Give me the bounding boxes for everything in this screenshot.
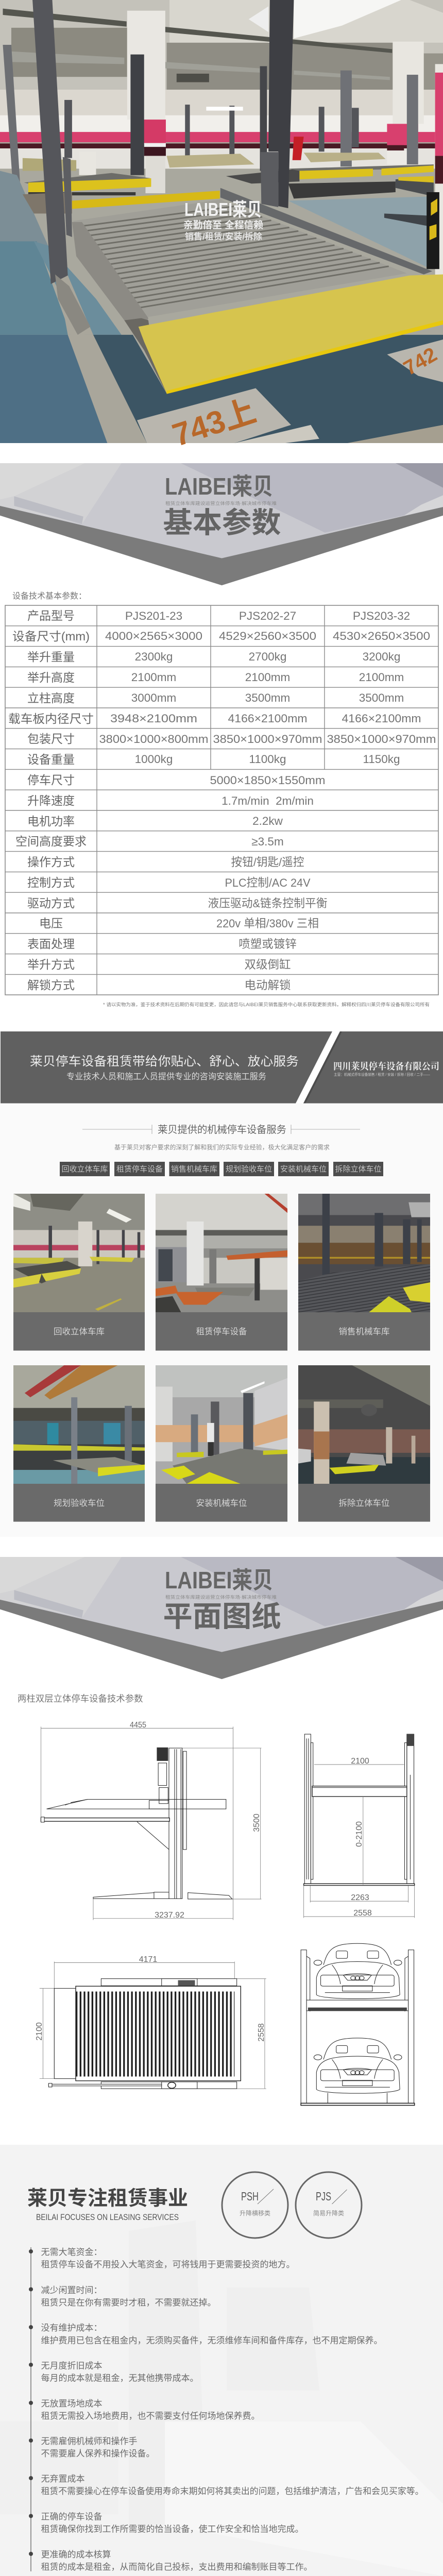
front elevation drawing <box>304 1734 415 1918</box>
card: recycling <box>13 1194 145 1351</box>
card: recycling: 回收立体车库 <box>54 1327 105 1336</box>
dark service banner <box>1 1031 443 1104</box>
dimension 2100: 2100 <box>351 1757 369 1766</box>
banner headline: 莱贝停车设备租赁带给你贴心、舒心、放心服务 <box>30 1055 299 1069</box>
card: removal <box>298 1365 430 1522</box>
plan view drawing <box>35 1955 266 2089</box>
badge: PSH <box>222 2172 288 2238</box>
panel: focus on leasing <box>0 2145 443 2576</box>
brand logo: LAIBEI莱贝 <box>165 1567 273 1594</box>
dimension 4455: 4455 <box>130 1721 146 1730</box>
parameter table: 举升方式 <box>27 958 75 971</box>
parameter table: 设备尺寸(mm) <box>12 630 90 643</box>
parameter table: 电机功率 <box>27 815 75 828</box>
service tags: 销售机械车库 <box>171 1165 217 1174</box>
table caption: 设备技术基本参数： <box>12 591 87 601</box>
benefits timeline: 无弃置成本 <box>41 2474 84 2484</box>
benefits timeline: 维护费用已包含在租金内，无须购买备件，无须维修车间和备件库存，也不用定期保养。 <box>41 2336 382 2345</box>
benefits timeline: 租赁无需投入场地费用，也不需要支付任何场地保养费。 <box>41 2411 260 2421</box>
badge: PSH: 升降横移类 <box>240 2210 270 2217</box>
benefits timeline: 租赁只是在你有需要时才租，不需要就还掉。 <box>41 2298 216 2308</box>
benefits timeline: 租赁确保你找到工作所需要的恰当设备，使工作安全和恰当地完成。 <box>41 2523 304 2534</box>
drawing caption: 两柱双层立体停车设备技术参数 <box>18 1693 143 1704</box>
parameter table: 载车板内径尺寸 <box>8 712 94 725</box>
service tags: 安装机械车位 <box>280 1165 327 1174</box>
service tags: 规划验收车位 <box>226 1165 272 1174</box>
section banner: plan drawings <box>0 1557 443 1679</box>
parameter table: 空间高度要求 <box>15 835 87 848</box>
parameter table: 停车尺寸 <box>27 773 75 787</box>
benefits timeline: 减少闲置时间： <box>41 2285 102 2295</box>
parameter table: 喷塑或镀锌 <box>238 938 297 951</box>
service tags <box>60 1162 383 1176</box>
floor marking 743: 743上 <box>168 393 260 453</box>
card: removal: 拆除立体车位 <box>339 1498 389 1508</box>
parameter table: 4530×2650×3500 <box>333 630 430 642</box>
parameter table: 按钮/钥匙/遥控 <box>231 856 304 869</box>
card: leasing <box>156 1194 287 1351</box>
brand tagline: 租赁立体车库建设运营立体停车场·解决城市停车难 <box>165 1595 277 1600</box>
benefits timeline: 无放置场地成本 <box>41 2399 102 2409</box>
company business line: 主营：机械式停车设备销售 / 租赁 / 安装 / 拆除 / 回收 / 二手—— <box>334 1072 430 1077</box>
parameter table: 3850×1000×970mm <box>327 733 436 745</box>
card: installation <box>156 1365 287 1522</box>
brand tagline: 租赁立体车库建设运营立体停车场·解决城市停车难 <box>165 501 277 506</box>
panel: machinery parking services <box>0 1104 443 1537</box>
dimension 4171: 4171 <box>139 1955 157 1964</box>
parameter table: 举升重量 <box>27 650 75 664</box>
card: leasing: 租赁停车设备 <box>196 1327 247 1336</box>
parameter table: 2.2kw <box>252 815 283 827</box>
parameter table: 3200kg <box>363 650 400 663</box>
parameter table: 表面处理 <box>27 937 75 951</box>
parameter table: 1.7m/min 2m/min <box>222 794 314 807</box>
table footnote: * 请以实物为准，鉴于技术资料在后期仍有可能变更，因此请您与LAIBEI莱贝销售服务中心联系获取更新资料。解释权归四川莱贝停车设备有限公司所有 <box>103 1002 430 1007</box>
parameter table: 1100kg <box>249 753 286 766</box>
benefits timeline: 无需雇佣机械师和操作手 <box>41 2436 137 2446</box>
parameter table: 2100mm <box>245 671 290 684</box>
side elevation drawing <box>41 1721 261 1920</box>
badge: PJS: PJS <box>316 2190 331 2203</box>
parameter table: PJS201-23 <box>125 609 182 622</box>
parameter table: 双级倒缸 <box>244 958 291 971</box>
parameter table: 2100mm <box>131 671 176 684</box>
parameter table: 1150kg <box>363 753 400 766</box>
watermark slogan: 亲勤倍至 全程信赖 <box>183 219 263 231</box>
benefits timeline: 无需大笔资金： <box>41 2247 102 2257</box>
dimension 2100 plan: 2100 <box>35 2022 44 2041</box>
parameter table: 4000×2565×3000 <box>105 630 202 642</box>
parameter table: 4529×2560×3500 <box>219 630 316 642</box>
parameter table: 2700kg <box>249 650 286 663</box>
parameter table: 3948×2100mm <box>110 712 197 725</box>
badge: PSH: PSH <box>241 2190 259 2203</box>
parameter table: 设备重量 <box>27 753 75 766</box>
parameter table: 解锁方式 <box>27 978 75 992</box>
parameter table: 220v 单相/380v 三相 <box>216 917 319 930</box>
parameter table: 3500mm <box>359 691 404 704</box>
dimension 2558 plan: 2558 <box>257 2023 266 2042</box>
banner heading: 基本参数 <box>163 506 281 539</box>
floor marking 742: 742 <box>400 343 441 380</box>
parameter table: 立柱高度 <box>27 691 75 705</box>
parameter table: 3500mm <box>245 691 290 704</box>
card: sales <box>298 1194 430 1351</box>
parameter table: 控制方式 <box>27 876 75 889</box>
service tags: 租赁停车设备 <box>116 1165 163 1174</box>
benefits timeline: 无月度折旧成本 <box>41 2361 102 2371</box>
parameter table: ≥3.5m <box>251 835 284 848</box>
dimension 0-2100: 0-2100 <box>355 1821 364 1847</box>
company calligraphy name: 四川莱贝停车设备有限公司 <box>333 1059 439 1073</box>
section banner: basic parameters <box>0 463 443 585</box>
section intro: 基于莱贝对客户要求的深刻了解和我们的实际专业经验，极大化满足客户的需求 <box>114 1143 330 1151</box>
banner heading: 平面图纸 <box>163 1600 281 1633</box>
benefits timeline: 租赁停车设备不用投入大笔资金，可将钱用于更需要投资的地方。 <box>41 2260 295 2269</box>
leasing subheading: BEILAI FOCUSES ON LEASING SERVICES <box>36 2212 179 2222</box>
parameter table: PJS202-27 <box>239 609 296 622</box>
technical drawings <box>35 1721 415 2105</box>
watermark logo: LAIBEI莱贝 <box>184 199 262 220</box>
watermark services: 销售/租赁/安装/拆除 <box>185 231 262 242</box>
parameter table: PJS203-32 <box>353 609 410 622</box>
parameter table: 2100mm <box>359 671 404 684</box>
dimension 3237.92: 3237.92 <box>155 1911 184 1920</box>
parameter table <box>5 605 438 995</box>
parameter table: 3800×1000×800mm <box>99 733 208 745</box>
hero photo: two-post parking lift <box>0 0 443 453</box>
parameter table: 升降速度 <box>27 794 75 807</box>
front view with cars <box>301 1943 415 2105</box>
parameter table: 操作方式 <box>27 855 75 869</box>
badge: PJS <box>296 2172 362 2238</box>
parameter table: 液压驱动&链条控制平衡 <box>208 897 328 910</box>
parameter table: 5000×1850×1550mm <box>210 774 326 787</box>
parameter table: 电动解锁 <box>244 979 291 992</box>
parameter table: 1000kg <box>135 753 173 766</box>
benefits timeline: 不需要雇人保养和操作设备。 <box>41 2449 155 2459</box>
service tags: 拆除立体车位 <box>335 1165 382 1174</box>
leasing heading: 莱贝专注租赁事业 <box>27 2188 188 2210</box>
benefits timeline: 没有维护成本： <box>41 2323 102 2333</box>
parameter table: 包装尺寸 <box>27 732 75 745</box>
benefits timeline: 正确的停车设备 <box>41 2512 102 2521</box>
parameter table: 4166×2100mm <box>342 712 421 725</box>
benefits timeline: 租赁不需要操心在停车设备使用寿命末期如何将其卖出的问题，包括维护清洁，广告和会见买家等。 <box>41 2486 423 2496</box>
card: planning: 规划验收车位 <box>54 1498 105 1508</box>
parameter table: 3850×1000×970mm <box>213 733 322 745</box>
card: installation: 安装机械车位 <box>196 1498 247 1508</box>
service tags: 回收立体车库 <box>61 1165 108 1174</box>
parameter table: 4166×2100mm <box>228 712 307 725</box>
card: sales: 销售机械车库 <box>339 1327 389 1336</box>
parameter table: 2300kg <box>135 650 173 663</box>
parameter table: 产品型号 <box>27 609 75 622</box>
section heading <box>82 1124 360 1136</box>
parameter table: 举升高度 <box>27 671 75 684</box>
badge: PJS: 简易升降类 <box>313 2210 344 2217</box>
benefits timeline: 更准确的成本核算 <box>41 2550 111 2560</box>
benefits timeline: 租赁的成本是租金，从而简化自己投标，支出费用和编制账目等工作。 <box>41 2562 312 2572</box>
parameter table: 电压 <box>39 917 63 930</box>
dimension 2263: 2263 <box>351 1893 369 1902</box>
benefits timeline <box>29 2247 423 2572</box>
parameter table: PLC控制/AC 24V <box>225 876 310 889</box>
dimension 2558: 2558 <box>353 1909 372 1918</box>
parameter table: 驱动方式 <box>27 896 75 910</box>
brand logo: LAIBEI莱贝 <box>165 473 273 500</box>
section heading: 莱贝提供的机械停车设备服务 <box>158 1124 286 1136</box>
parameter table: 3000mm <box>131 691 176 704</box>
dimension 3500: 3500 <box>252 1814 261 1832</box>
banner subline: 专业技术人员和施工人员提供专业的咨询安装施工服务 <box>66 1072 266 1081</box>
card: planning <box>13 1365 145 1522</box>
benefits timeline: 每月的成本就是租金，无其他携带成本。 <box>41 2373 199 2383</box>
